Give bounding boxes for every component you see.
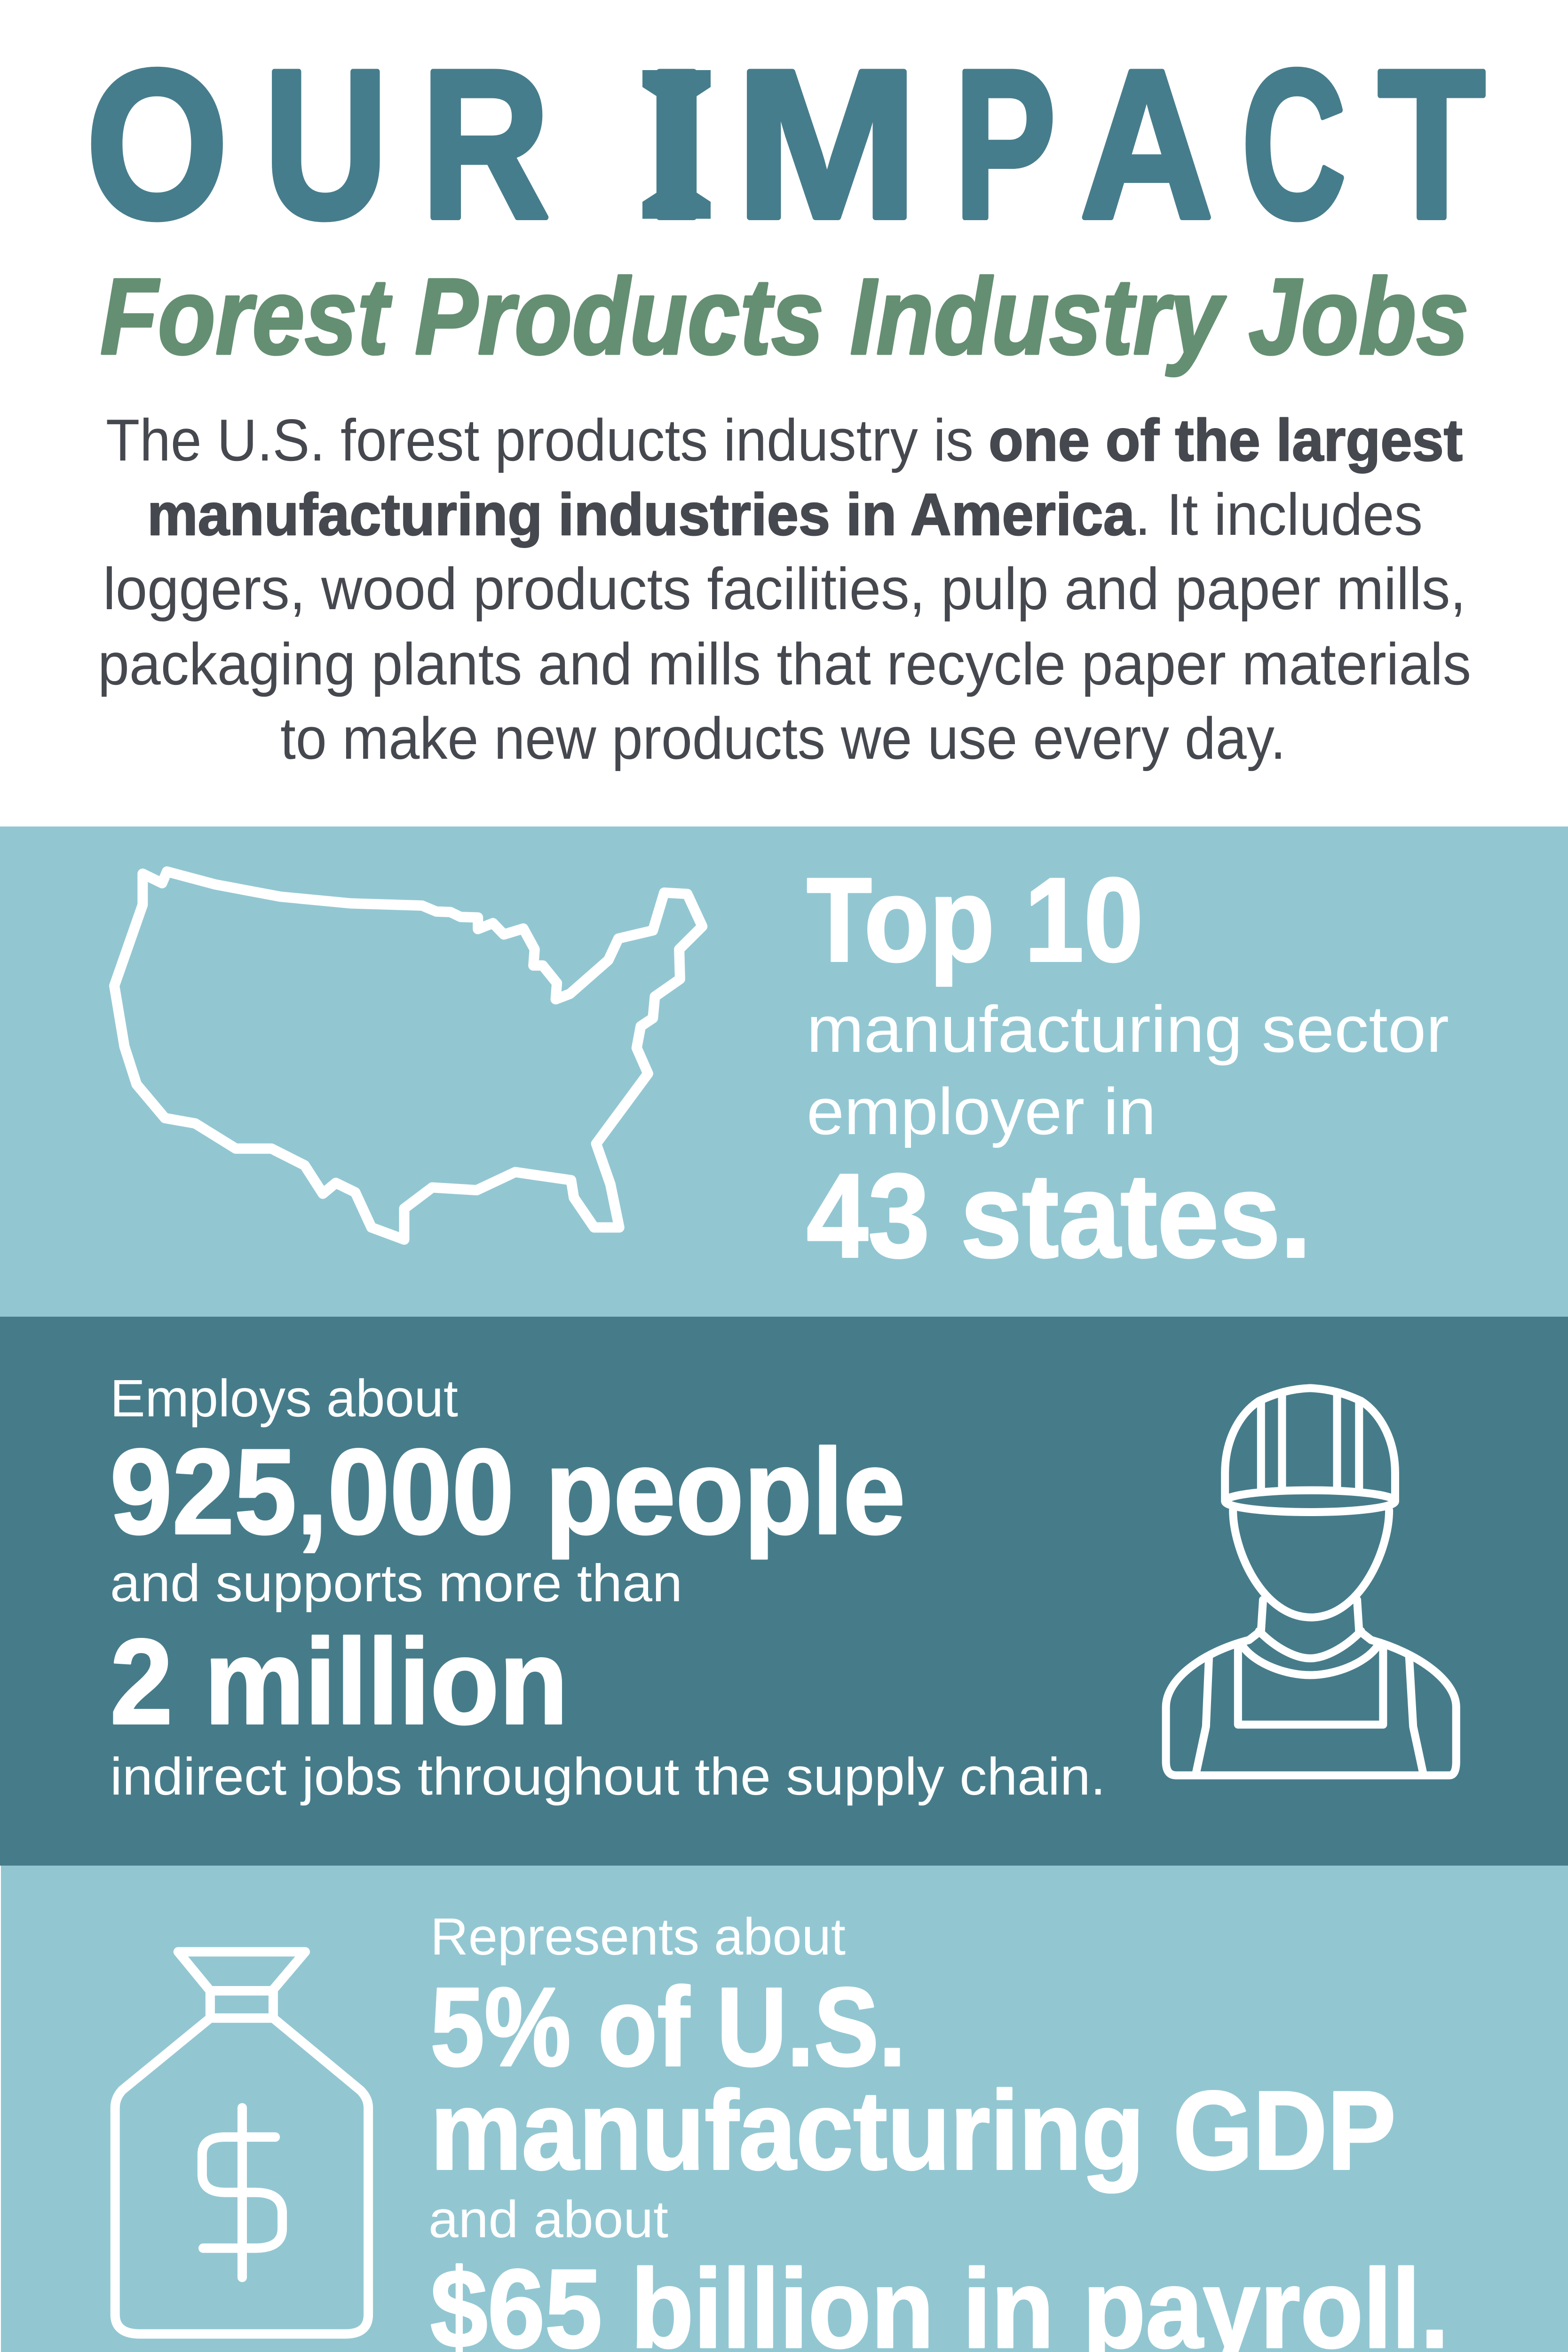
title: C — [1242, 26, 1346, 262]
title: P — [954, 26, 1056, 262]
text: GDP and payroll: Represents about — [430, 1907, 846, 1966]
text: top 10: Top 10 — [807, 853, 1143, 986]
icon: worker with hard hat — [1166, 1388, 1456, 1775]
text: employment figures: 925,000 people — [110, 1423, 905, 1560]
text: employment figures: and supports more than — [110, 1554, 682, 1613]
title: U — [264, 26, 388, 262]
text: GDP and payroll: 5% of U.S. — [430, 1965, 906, 2090]
title: M — [735, 26, 919, 262]
title: I — [644, 26, 709, 262]
text: employment figures: 2 million — [110, 1613, 568, 1749]
intro paragraph: one of the largest — [989, 407, 1463, 473]
panel: GDP and payroll — [1, 1866, 1568, 2352]
title: T — [1378, 26, 1485, 262]
title — [86, 26, 1485, 262]
title: R — [421, 26, 550, 262]
intro paragraph: . It includes — [1135, 481, 1423, 548]
text: GDP and payroll — [428, 1907, 1449, 2352]
icon: money bag — [115, 1952, 368, 2334]
intro paragraph: The U.S. forest products industry is — [106, 407, 974, 473]
title: A — [1080, 26, 1213, 262]
text: top 10 — [807, 853, 1449, 1282]
intro paragraph: loggers, wood products facilities, pulp and paper mills, — [103, 556, 1466, 622]
panel: employment — [0, 1317, 1568, 1866]
intro paragraph: packaging plants and mills that recycle paper materials — [98, 631, 1471, 697]
intro paragraph: to make new products we use every day. — [280, 705, 1286, 771]
title: O — [86, 26, 228, 262]
intro paragraph: manufacturing industries in America — [147, 481, 1135, 548]
intro paragraph — [98, 407, 1471, 771]
panel: top 10 employer — [0, 826, 1568, 1317]
text: GDP and payroll: manufacturing GDP — [430, 2068, 1396, 2193]
text: top 10: employer in — [807, 1074, 1156, 1148]
text: employment figures: indirect jobs throughout the supply chain. — [110, 1747, 1106, 1806]
text: top 10: 43 states. — [807, 1149, 1311, 1282]
text: GDP and payroll: and about — [428, 2190, 668, 2249]
text: top 10: manufacturing sector — [807, 992, 1449, 1066]
text: employment figures: Employs about — [110, 1369, 458, 1428]
text: employment figures — [110, 1369, 1106, 1806]
icon: US map outline — [114, 872, 702, 1240]
